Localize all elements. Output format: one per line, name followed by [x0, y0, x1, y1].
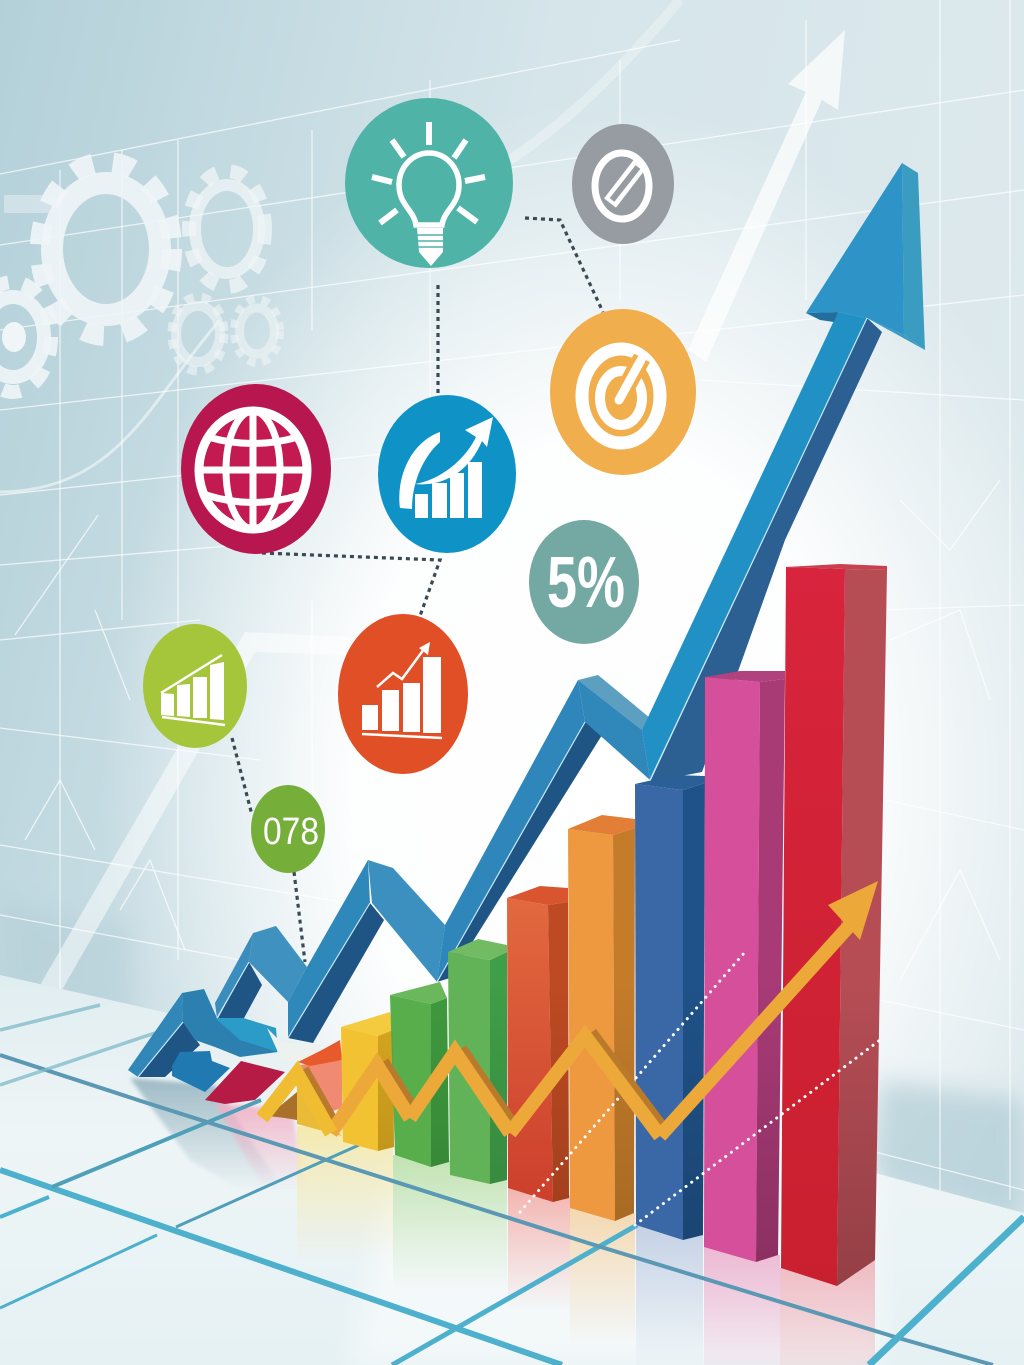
bar: red — [781, 564, 887, 1286]
gear: small right — [234, 299, 280, 363]
gear: left edge — [0, 282, 51, 392]
icon: teal five percent badge — [529, 520, 639, 644]
orange zigzag arrow — [262, 881, 878, 1136]
blue growth arrow — [128, 163, 925, 1077]
bar: blue — [635, 775, 705, 1240]
bar: yellow — [341, 1012, 394, 1151]
icon: teal light bulb — [345, 98, 513, 268]
gear: small centre — [172, 297, 224, 371]
white dotted trend lines — [520, 952, 880, 1225]
icon: lime bar chart — [143, 624, 247, 748]
arrow rising segments — [215, 312, 867, 1038]
bar side shading — [378, 569, 887, 1286]
3D bar chart — [297, 564, 887, 1286]
gear: upper right — [189, 171, 265, 287]
rubble blocks at arrow base — [172, 1040, 342, 1120]
bar: orange red — [507, 886, 569, 1202]
floor — [0, 975, 1024, 1365]
blue block — [172, 1051, 230, 1092]
bar: green — [448, 939, 507, 1184]
arrow highlight edges — [138, 163, 904, 1077]
arrow underside shadow faces — [138, 318, 882, 1077]
icon: crimson globe — [181, 384, 331, 554]
bar: light green — [390, 982, 449, 1167]
bar reflections on floor — [130, 1078, 875, 1365]
bar: pink — [704, 671, 785, 1262]
icon: teal five percent badge: 5% — [547, 543, 625, 623]
dotted connector lines — [232, 218, 603, 962]
arrow head — [806, 163, 925, 350]
icon: orange target — [550, 309, 696, 475]
bar: small yellow — [297, 1063, 342, 1136]
icon: blue growth chart — [378, 395, 516, 553]
arrow lower cluster segment — [128, 989, 322, 1077]
salmon and red block — [268, 1040, 342, 1120]
icon: red-orange bar chart — [338, 614, 468, 774]
background white arrow upper right — [688, 30, 845, 362]
floor grid lines — [0, 1005, 1024, 1365]
zigzag shaded side faces — [304, 1032, 667, 1132]
background diagonal light band — [0, 0, 680, 990]
gear: large — [4, 162, 172, 336]
background gears — [0, 162, 280, 392]
bar: orange — [568, 815, 635, 1221]
crimson block — [205, 1061, 285, 1104]
icon: green number badge — [251, 785, 325, 873]
icon: green number badge: 078 — [263, 811, 319, 853]
icon: grey target badge — [572, 124, 674, 244]
